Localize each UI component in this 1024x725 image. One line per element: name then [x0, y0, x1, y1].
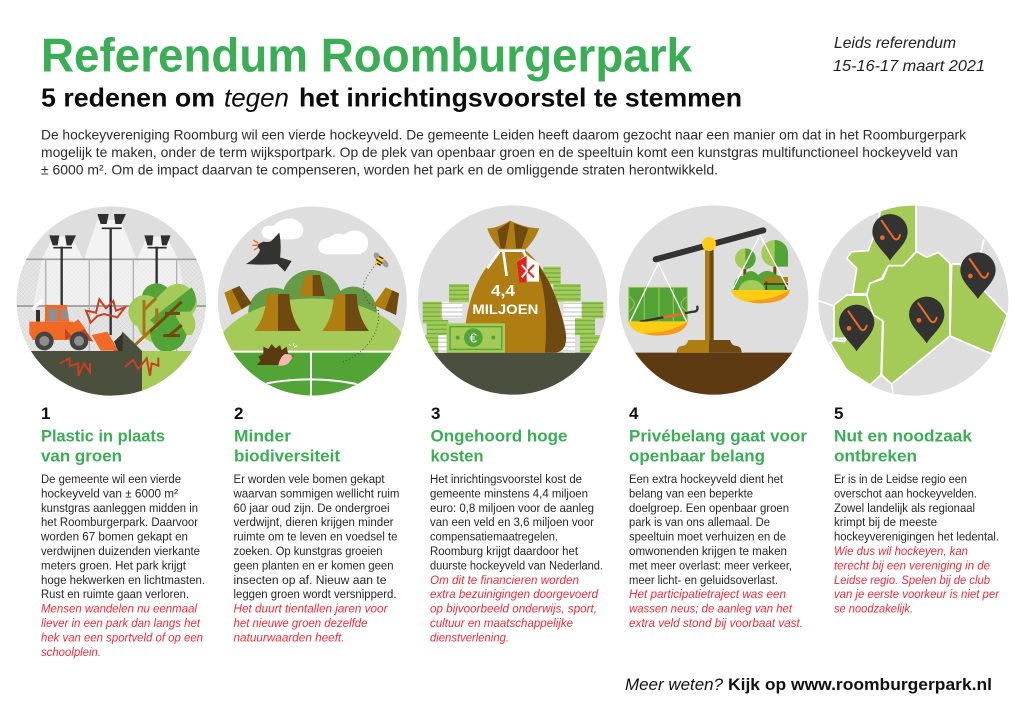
reason 5: Wie dus wil hockeyen, kan: [834, 544, 968, 558]
reason 4: met meer overlast: meer verkeer,: [629, 558, 792, 572]
reason 4: Een extra hockeyveld dient het: [629, 472, 784, 486]
reason 5: krimpt bij de meeste: [834, 515, 937, 529]
reason 1: Rust en ruimte gaan verloren.: [41, 587, 189, 601]
park on right pan: [743, 268, 746, 276]
referendum date: [833, 35, 985, 75]
reason 3: Om dit te financieren worden: [430, 573, 579, 587]
reason 4: meer licht- en geluidsoverlast.: [629, 573, 778, 587]
reason 3: kosten: [430, 446, 484, 466]
reason 3: Ongehoord hoge: [430, 426, 568, 446]
referendum date: Leids referendum: [834, 35, 956, 52]
reason 2: 2: [234, 404, 243, 423]
reason 4: extra veld stond bij voorbaat vast.: [629, 616, 803, 630]
intro text: De hockeyvereniging Roomburg wil een vierde hockeyveld. De gemeente Leiden heeft daarom gezocht naar een manier om dat in het Roomburgerpark: [41, 128, 966, 142]
reason 2: verdwijnt, dieren krijgen minder: [234, 515, 394, 529]
reason 4: Het participatietraject was een: [629, 587, 786, 601]
bag: [463, 250, 566, 353]
reason 5: overschot aan hockeyvelden.: [834, 486, 977, 500]
reason 3: cultuur en maatschappelijke: [430, 616, 573, 630]
reason 2: geen planten en er komen geen: [234, 558, 394, 572]
reason 3: dienstverlening.: [430, 630, 509, 644]
hills: [284, 270, 340, 300]
reason 4: park is van ons allemaal. De: [629, 515, 770, 529]
hockey field on left pan: [629, 287, 687, 322]
reason 3: [430, 404, 603, 644]
bee: [341, 263, 379, 363]
reason 3: euro: 0,8 miljoen voor de aanleg: [430, 501, 594, 515]
reason 1: 1: [41, 404, 50, 423]
reason 2: natuurwaarden heeft.: [234, 630, 344, 644]
base and column: [677, 340, 709, 353]
bulldozer: [36, 310, 40, 322]
reason 3: duurste hockeyveld van Nederland.: [430, 558, 603, 572]
reason 1: liever in een park dan langs het: [41, 616, 201, 630]
subtitle: tegen: [224, 82, 289, 112]
hockey stick: [641, 307, 697, 322]
reason 1: Plastic in plaats: [41, 426, 165, 446]
reason 5: se noodzakelijk.: [834, 602, 913, 616]
reason 5: ontbreken: [834, 446, 917, 466]
subtitle: het inrichtingsvoorstel te stemmen: [299, 82, 742, 112]
reason 1: kunstgras aanleggen midden in: [41, 501, 198, 515]
reason 5: Er is in de Leidse regio een: [834, 472, 967, 486]
referendum date: 15-16-17 maart 2021: [833, 58, 985, 75]
reason 5: Nut en noodzaak: [834, 426, 973, 446]
reason 2: insecten op af. Nieuw aan te: [234, 573, 387, 587]
illustration: felled trees, bird, bee and hedgehog: [218, 206, 407, 396]
illustration: regional map with hockey pins: [818, 206, 1008, 396]
reason 3: 3: [431, 404, 440, 423]
sports field: [232, 352, 392, 396]
ground: [31, 351, 142, 396]
reason 2: 60 jaar oud zijn. De ondergroei: [234, 501, 390, 515]
reason 2: Het duurt tientallen jaren voor: [234, 602, 388, 616]
reason 2: ruimte om te leven en voedsel te: [234, 530, 398, 544]
reason 2: waarvan sommigen wellicht ruim: [233, 486, 400, 500]
reason 5: Leidse regio. Spelen bij de club: [834, 573, 990, 587]
beam: [656, 230, 763, 259]
footer call to action: Meer weten?: [625, 675, 724, 694]
illustration: money bag of 4,4 miljoen: €: [470, 331, 478, 346]
reason 4: omwonenden krijgen te maken: [629, 544, 787, 558]
reason 2: zoeken. Op kunstgras groeien: [234, 544, 382, 558]
bag label: MILJOEN: [472, 301, 538, 317]
reason 3: van een veld en 3,6 miljoen voor: [430, 515, 594, 529]
reason 2: Er worden vele bomen gekapt: [234, 472, 385, 486]
reason 3: gemeente minstens 4,4 miljoen: [430, 486, 588, 500]
reason 3: extra bezuinigingen doorgevoerd: [430, 587, 599, 601]
intro text: ± 6000 m². Om de impact daarvan te compenseren, worden het park en de omliggende straten herontwikkeld.: [41, 162, 718, 178]
reason 4: openbaar belang: [629, 446, 765, 466]
reason 2: Minder: [234, 426, 291, 446]
reason 5: Zowel landelijk als regionaal: [834, 501, 975, 515]
reason 4: speeltuin moet verhuizen en de: [629, 530, 786, 544]
reason 5: [834, 404, 1000, 616]
hedgehog: [257, 344, 288, 365]
map pins: [839, 214, 996, 351]
reason 2: leggen groen wordt versnipperd.: [234, 587, 396, 601]
reason 5: terecht bij een vereniging in de: [834, 558, 990, 572]
reason 3: op bijvoorbeeld onderwijs, sport,: [430, 602, 597, 616]
subtitle: [41, 82, 742, 112]
reason 1: het Roomburgerpark. Daarvoor: [41, 515, 198, 529]
reason 1: schoolplein.: [41, 645, 101, 659]
tree: [142, 283, 168, 298]
reason 4: Privébelang gaat voor: [629, 426, 807, 446]
reason 1: hek van een sportveld of op een: [41, 630, 203, 644]
title: Referendum Roomburgerpark: [41, 28, 693, 82]
illustration: balance scale: [619, 206, 808, 395]
footer call to action: Kijk op www.roomburgerpark.nl: [728, 675, 992, 694]
illustration: bulldozer, fence and floodlights: [16, 206, 206, 396]
reason 5: hockeyverenigingen het ledental.: [834, 530, 999, 544]
reason 2: [233, 404, 400, 644]
reason 4: doelgroep. Een openbaar groen: [629, 501, 789, 515]
reason 3: compensatiemaatregelen.: [430, 530, 558, 544]
illustration: money bag of 4,4 miljoen: [418, 206, 608, 395]
reason 5: 5: [834, 404, 843, 423]
bag label: 4,4: [491, 283, 515, 300]
banknote: [447, 323, 505, 353]
reason 1: verdwijnen duizenden vierkante: [41, 544, 200, 558]
subtitle: 5 redenen om: [41, 82, 215, 112]
reason 4: 4: [629, 404, 639, 423]
reason 1: hockeyveld van ± 6000 m²: [41, 486, 178, 500]
reason 2: biodiversiteit: [234, 446, 340, 466]
tag with Leiden keys: [517, 255, 539, 282]
reason 3: Roomburg krijgt daardoor het: [430, 544, 579, 558]
intro text: [41, 128, 966, 178]
bag label: [473, 285, 538, 314]
left pan: [630, 263, 687, 322]
crash marks: [60, 299, 158, 376]
reason 1: van groen: [41, 446, 122, 466]
reason 2: het nieuwe groen dezelfde: [234, 616, 368, 630]
stumps: [254, 294, 301, 331]
reason 1: hoge hekwerken en lichtmasten.: [41, 573, 205, 587]
money stacks: [423, 302, 443, 323]
reason 1: Mensen wandelen nu eenmaal: [41, 602, 197, 616]
reason 4: belang van een beperkte: [629, 486, 753, 500]
reason 3: Het inrichtingsvoorstel kost de: [430, 472, 582, 486]
reason 5: van je eerste voorkeur is niet per: [834, 587, 1000, 601]
reason 4: wassen neus; de aanleg van het: [629, 602, 793, 616]
bird: [246, 233, 292, 272]
reason 1: [40, 404, 205, 659]
intro text: mogelijk te maken, onder de term wijksportpark. Op de plek van openbaar groen en de speeltuin komt een kunstgras multifunctioneel hockeyveld van: [41, 145, 958, 160]
reason 4: [629, 404, 807, 630]
reason 1: worden 67 bomen gekapt en: [40, 530, 188, 544]
reason 1: meters groen. Het park krijgt: [41, 558, 187, 572]
reason 1: De gemeente wil een vierde: [41, 472, 181, 486]
